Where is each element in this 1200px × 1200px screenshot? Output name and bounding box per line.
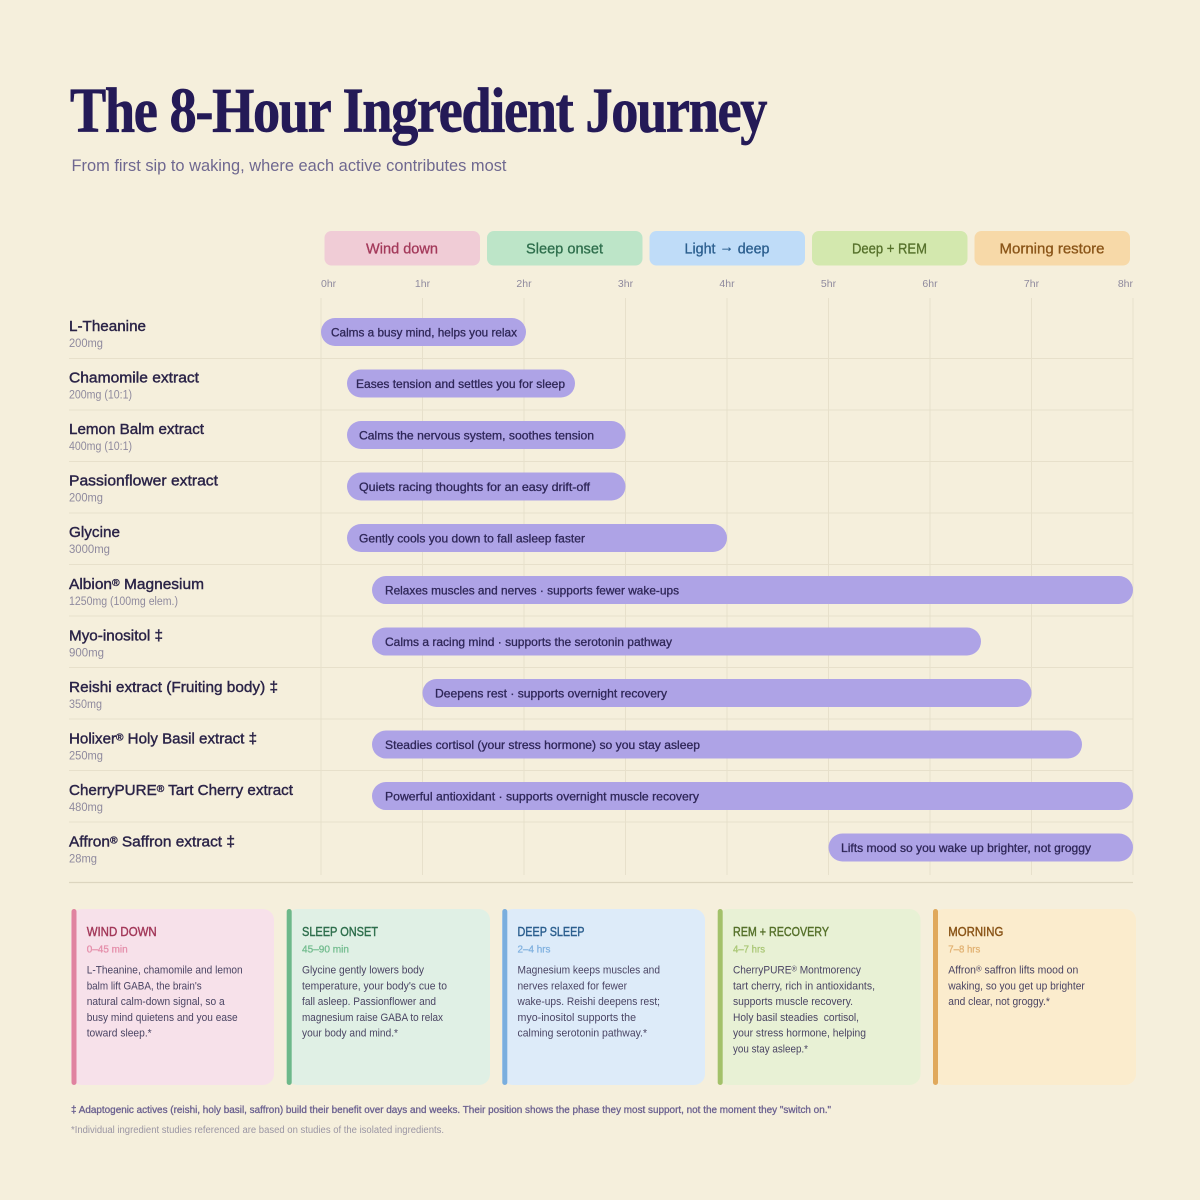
- row: Saffron: Lifts mood so you wake up brighter, not groggy: [841, 841, 1091, 855]
- card: wind down: WIND DOWN: [87, 925, 157, 939]
- phase: morning restore: Morning restore: [1000, 242, 1104, 258]
- card: sleep onset: 45–90 min: [302, 944, 349, 956]
- hour axis labels: 4hr: [719, 278, 735, 290]
- card: morning: [933, 909, 1136, 1085]
- row: Myo-inositol: Myo-inositol ‡: [69, 628, 163, 644]
- row: Albion Magnesium: Relaxes muscles and nerves · supports fewer wake-ups: [385, 584, 679, 598]
- card: deep sleep: calming serotonin pathway.*: [518, 1028, 648, 1040]
- phase cards: [71, 909, 1136, 1085]
- row: Myo-inositol: Calms a racing mind · supports the serotonin pathway: [385, 635, 672, 649]
- row: Glycine: [69, 524, 727, 556]
- phase: morning restore: [974, 231, 1130, 266]
- hour axis labels: 2hr: [516, 278, 532, 290]
- row: Glycine: Gently cools you down to fall asleep faster: [359, 532, 585, 546]
- phase: deep and REM: Deep + REM: [852, 242, 927, 258]
- card: wind down: L-Theanine, chamomile and lemon: [87, 964, 243, 976]
- row: Holy Basil: ®: [116, 732, 124, 744]
- footnote: ingredient studies: *Individual ingredient studies referenced are based on studies of the isolated ingredients.: [71, 1125, 444, 1136]
- row: Albion Magnesium: Albion: [69, 576, 111, 593]
- row: L-Theanine: 200mg: [69, 338, 103, 350]
- row: Chamomile: Chamomile extract: [69, 370, 200, 386]
- row: Holy Basil: Steadies cortisol (your stress hormone) so you stay asleep: [385, 738, 700, 752]
- row: Lemon Balm: [69, 421, 626, 453]
- footnote: adaptogenic actives: ‡ Adaptogenic actives (reishi, holy basil, saffron) build their benefit over days and weeks. Their position shows the phase they most support, not the moment they "switch on.": [71, 1105, 831, 1116]
- row: Albion Magnesium: Magnesium: [120, 576, 204, 593]
- row: Holy Basil: Holixer: [69, 730, 116, 748]
- card: morning: Affron: [948, 964, 977, 976]
- card: REM and recovery: ®: [791, 964, 797, 974]
- ingredient rows: [69, 318, 1133, 866]
- phase: sleep onset: Sleep onset: [526, 242, 603, 258]
- card: REM and recovery: 4–7 hrs: [733, 944, 765, 956]
- card: REM and recovery: tart cherry, rich in antioxidants,: [733, 980, 875, 992]
- phase header pills: [324, 231, 1130, 266]
- row: Passionflower: [69, 472, 626, 504]
- card: deep sleep: myo-inositol supports the: [518, 1012, 636, 1024]
- row: Saffron: Saffron extract ‡: [118, 834, 235, 850]
- row: Tart Cherry: Tart Cherry extract: [164, 782, 294, 799]
- card: morning: ®: [976, 964, 982, 974]
- phase: sleep onset: [487, 231, 642, 266]
- hour axis labels: [321, 278, 1133, 290]
- row: Chamomile: 200mg (10:1): [69, 390, 132, 402]
- row: Albion Magnesium: [69, 576, 1133, 608]
- row: Holy Basil: [69, 730, 1082, 762]
- card: morning: and clear, not groggy.*: [948, 996, 1050, 1008]
- row: Albion Magnesium: 1250mg (100mg elem.): [69, 596, 178, 608]
- card: wind down: toward sleep.*: [87, 1028, 152, 1040]
- row: Chamomile: Eases tension and settles you for sleep: [356, 377, 565, 391]
- card: wind down: [71, 909, 274, 1085]
- row: Tart Cherry: Powerful antioxidant · supports overnight muscle recovery: [385, 790, 699, 804]
- card: deep sleep: nerves relaxed for fewer: [518, 980, 627, 992]
- row: Glycine: 3000mg: [69, 544, 110, 556]
- row: Saffron: Affron: [69, 834, 109, 850]
- row: Lemon Balm: 400mg (10:1): [69, 441, 132, 453]
- row: Reishi: Deepens rest · supports overnight recovery: [435, 686, 667, 700]
- hour axis labels: 6hr: [922, 278, 938, 290]
- row: Lemon Balm: Calms the nervous system, soothes tension: [359, 428, 594, 442]
- row: Holy Basil: Holy Basil extract ‡: [123, 730, 257, 748]
- row: Reishi: [69, 679, 1032, 711]
- card: deep sleep: [502, 909, 705, 1085]
- phase: light to deep: deep: [734, 242, 770, 258]
- card: morning: MORNING: [948, 925, 1003, 939]
- card: deep sleep: 2–4 hrs: [518, 944, 550, 956]
- card: sleep onset: magnesium raise GABA to relax: [302, 1012, 443, 1024]
- subtitle: From first sip to waking, where each active contributes most: [72, 156, 507, 175]
- phase: deep and REM: [812, 231, 968, 266]
- row: Tart Cherry: [69, 782, 1133, 814]
- phase: light to deep: Light: [684, 242, 716, 258]
- row: Saffron: 28mg: [69, 854, 97, 866]
- card: wind down: busy mind quietens and you ease: [87, 1012, 238, 1024]
- row: Holy Basil: 250mg: [69, 750, 103, 762]
- hour axis labels: 8hr: [1118, 278, 1133, 290]
- row: Saffron: ®: [110, 836, 118, 846]
- row: Passionflower: Passionflower extract: [69, 472, 219, 490]
- card: REM and recovery: REM + RECOVERY: [733, 925, 830, 939]
- card: wind down: 0–45 min: [87, 944, 128, 956]
- row: L-Theanine: Calms a busy mind, helps you relax: [331, 326, 517, 340]
- card: sleep onset: fall asleep. Passionflower and: [302, 996, 436, 1008]
- row: Saffron: [69, 834, 1133, 866]
- hour axis labels: 0hr: [321, 278, 337, 290]
- card: morning: 7–8 hrs: [948, 944, 980, 956]
- card: REM and recovery: your stress hormone, helping: [733, 1028, 866, 1040]
- row: Albion Magnesium: ®: [112, 578, 120, 589]
- row: Passionflower: Quiets racing thoughts for an easy drift-off: [359, 480, 591, 494]
- card: sleep onset: SLEEP ONSET: [302, 925, 378, 939]
- row: Passionflower: 200mg: [69, 492, 103, 504]
- card: deep sleep: Magnesium keeps muscles and: [518, 964, 660, 976]
- card: morning: waking, so you get up brighter: [947, 980, 1085, 992]
- card: sleep onset: temperature, your body's cue to: [302, 980, 447, 992]
- row: Glycine: Glycine: [69, 524, 120, 541]
- card: sleep onset: your body and mind.*: [302, 1028, 399, 1040]
- hour axis labels: 7hr: [1024, 278, 1040, 290]
- row: L-Theanine: [69, 318, 526, 350]
- row: Myo-inositol: [69, 628, 981, 660]
- card: deep sleep: wake-ups. Reishi deepens rest;: [517, 996, 660, 1008]
- hour axis labels: 1hr: [415, 278, 431, 290]
- phase: light to deep: [650, 231, 805, 266]
- row: Myo-inositol: 900mg: [69, 648, 104, 660]
- card: REM and recovery: Montmorency: [797, 964, 861, 976]
- card: REM and recovery: CherryPURE: [733, 964, 797, 976]
- phase: wind down: [324, 231, 480, 266]
- phase: wind down: Wind down: [366, 242, 438, 258]
- row: Tart Cherry: 480mg: [69, 802, 103, 814]
- row: Lemon Balm: Lemon Balm extract: [69, 421, 205, 438]
- row: Tart Cherry: CherryPURE: [69, 782, 156, 799]
- card: morning: saffron lifts mood on: [982, 964, 1078, 976]
- title: The 8-Hour Ingredient Journey: [70, 76, 767, 146]
- row: L-Theanine: L-Theanine: [69, 318, 146, 335]
- card: deep sleep: DEEP SLEEP: [518, 925, 584, 939]
- card: sleep onset: [286, 909, 490, 1085]
- card: sleep onset: Glycine gently lowers body: [302, 964, 424, 976]
- row: Chamomile: [69, 370, 575, 402]
- card: wind down: balm lift GABA, the brain's: [87, 980, 202, 992]
- row: Tart Cherry: ®: [157, 784, 165, 795]
- card: REM and recovery: you stay asleep.*: [733, 1044, 809, 1056]
- row: Reishi: 350mg: [69, 699, 102, 711]
- card: REM and recovery: [718, 909, 920, 1085]
- card: REM and recovery: Holy basil steadies cortisol,: [733, 1012, 859, 1024]
- row: Reishi: Reishi extract (Fruiting body) ‡: [69, 679, 278, 696]
- card: REM and recovery: supports muscle recovery.: [733, 996, 853, 1008]
- hour axis labels: 5hr: [821, 278, 837, 290]
- card: wind down: natural calm-down signal, so a: [87, 996, 226, 1008]
- hour axis labels: 3hr: [618, 278, 634, 290]
- phase: light to deep: →: [719, 240, 734, 256]
